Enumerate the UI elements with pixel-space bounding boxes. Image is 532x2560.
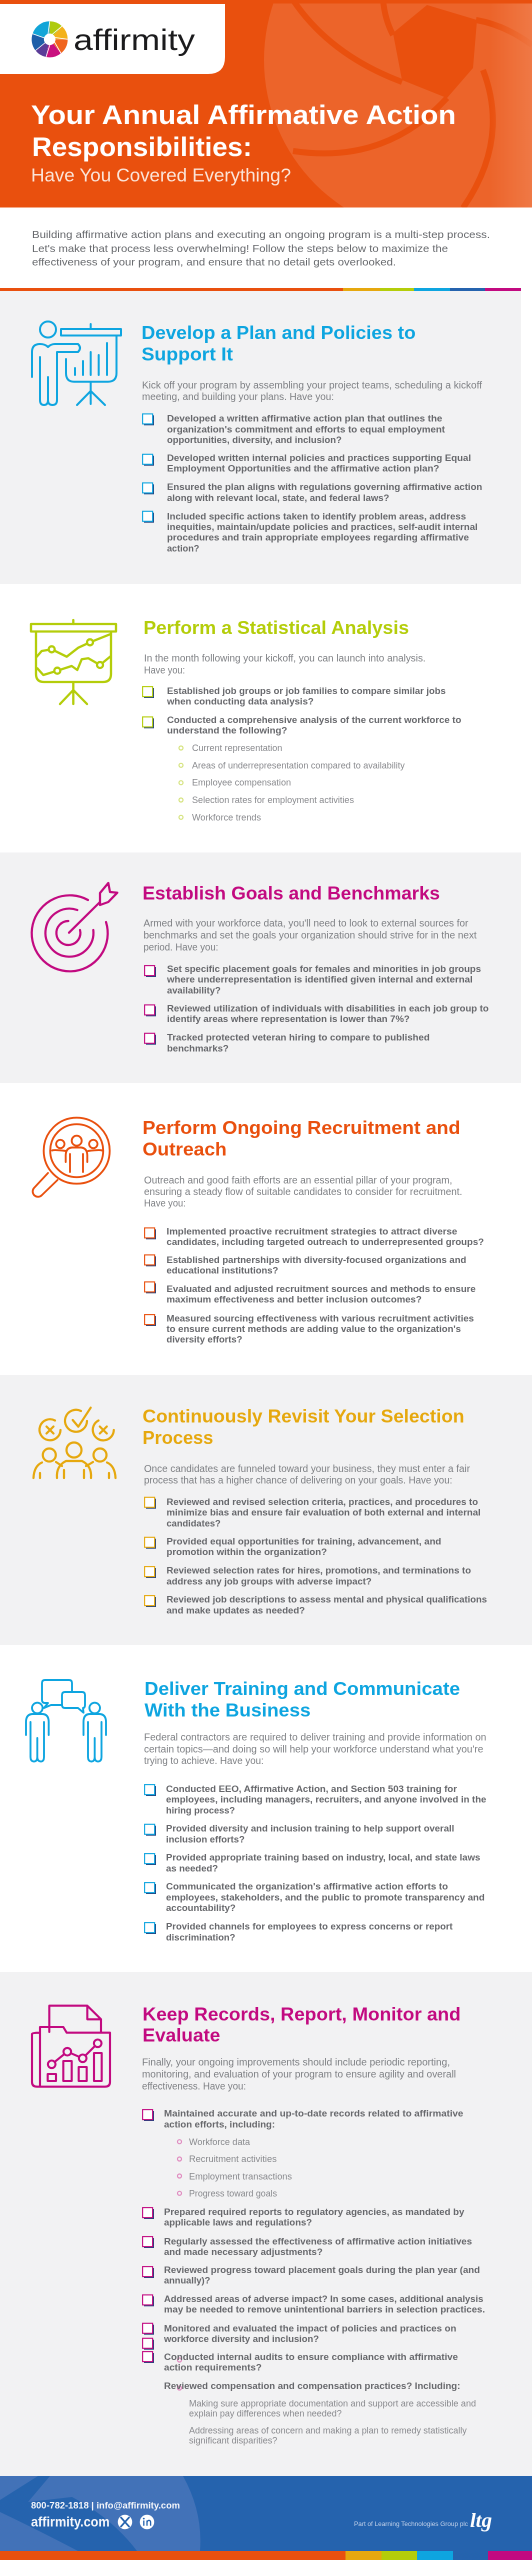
checklist item [145, 1535, 442, 1557]
panel: develop a plan [0, 291, 521, 584]
checklist item [143, 2338, 458, 2373]
panel: recruitment and outreach [33, 1117, 484, 1345]
checklist item [145, 1565, 471, 1586]
sub-bullet list: Addressing areas of concern and making a plan to remedy statistically [189, 2426, 467, 2436]
sub-bullet list: Workforce data [189, 2137, 250, 2147]
checklist item: employees, stakeholders, and the public to promote transparency and [166, 1891, 485, 1902]
heading [142, 2003, 461, 2046]
sub-bullet list: Workforce trends [192, 812, 262, 822]
intro paragraph: Kick off your program by assembling your project teams, scheduling a kickoff [142, 380, 482, 391]
intro paragraph: period. Have you: [144, 942, 218, 953]
checklist item: Provided channels for employees to express concerns or report [166, 1921, 453, 1932]
checklist item: address any job groups with adverse impact? [166, 1575, 372, 1586]
orange background [0, 0, 532, 208]
intro paragraph [144, 1733, 486, 1767]
checklist item [143, 2235, 472, 2257]
checklist item: benchmarks? [167, 1042, 229, 1053]
aperture watermark [264, 4, 532, 208]
checklist item: Developed written internal policies and practices supporting Equal [167, 452, 471, 463]
checklist item [145, 1282, 476, 1305]
intro paragraph: Finally, your ongoing improvements should include periodic reporting, [142, 2058, 450, 2069]
footer watermark [0, 2476, 200, 2551]
heading [142, 1406, 464, 1448]
footer background [0, 2476, 532, 2551]
checklist item [143, 2206, 465, 2228]
sub-bullet list [179, 743, 405, 822]
heading: Process [142, 1427, 213, 1448]
checklist item: to ensure current methods are adding value to the organization's [166, 1323, 461, 1334]
checklist item: annually)? [164, 2275, 211, 2286]
intro text: effectiveness of your program, and ensure that no detail gets overlooked. [32, 258, 396, 268]
sub-bullet list [178, 2137, 293, 2199]
checklist item: Reviewed compensation and compensation practices? Including: [164, 2380, 460, 2391]
checklist item: action efforts, including: [164, 2118, 275, 2129]
panel background [0, 291, 521, 584]
icon: two people talking [26, 1680, 106, 1762]
icon: presenter with chart [32, 322, 121, 405]
footer [0, 2476, 532, 2560]
intro paragraph: benchmarks and set the goals your organization should strive for in the next [144, 931, 477, 942]
sub-bullet list: Employment transactions [189, 2171, 293, 2181]
checklist item [145, 1312, 474, 1345]
checklist item: procedures and train appropriate employees regarding affirmative [167, 532, 469, 543]
checklist item [145, 1881, 485, 1913]
checklist item: Conducted EEO, Affirmative Action, and Section 503 training for [166, 1783, 457, 1794]
panel background [0, 1972, 532, 2476]
heading: Evaluate [142, 2025, 220, 2046]
heading: Establish Goals and Benchmarks [142, 883, 440, 904]
intro paragraph: ensuring a steady flow of suitable candidates to consider for recruitment. [144, 1187, 462, 1198]
sub-bullet list: Recruitment activities [189, 2154, 277, 2164]
website: affirmity.com [31, 2514, 110, 2530]
checklist item: Prepared required reports to regulatory agencies, as mandated by [164, 2206, 465, 2217]
checklist item: when conducting data analysis? [166, 696, 314, 707]
heading: With the Business [144, 1699, 311, 1720]
sub-bullet list: explain pay differences when needed? [189, 2408, 342, 2418]
intro paragraph: Federal contractors are required to deliver training and provide information on [144, 1733, 486, 1744]
checklist item: hiring process? [166, 1804, 235, 1815]
contact line: 800-782-1818 | info@affirmity.com [31, 2499, 180, 2510]
checklist item [145, 1594, 487, 1615]
checklist item: diversity efforts? [166, 1334, 243, 1345]
checklist item: Monitored and evaluated the impact of policies and practices on [164, 2322, 457, 2333]
checklist item [145, 1852, 480, 1873]
rainbow divider [0, 288, 521, 291]
intro paragraph: trying to achieve. Have you: [144, 1756, 264, 1767]
icon: affirmity aperture logo [32, 21, 68, 57]
intro paragraph: monitoring, and evaluation of your program to ensure agility and overall [142, 2069, 456, 2080]
intro paragraph: effectiveness. Have you: [142, 2081, 246, 2092]
checklist item: minimize bias and ensure fair evaluation of both external and internal [166, 1507, 481, 1518]
panel: selection process [0, 1375, 532, 1645]
checklist item: Established job groups or job families to compare similar jobs [167, 685, 446, 696]
checklist item: may be needed to remove unintentional barriers in selection practices. [164, 2304, 485, 2315]
icon: folder with chart [32, 2006, 110, 2087]
heading: Support It [142, 344, 233, 364]
checklist item: Addressed areas of adverse impact? In some cases, additional analysis [164, 2293, 483, 2304]
checklist item: opportunities, diversity, and inclusion? [167, 434, 342, 445]
sub-bullet list: Areas of underrepresentation compared to availability [192, 760, 405, 770]
title: Responsibilities: [32, 132, 252, 162]
checklist item: and make updates as needed? [166, 1604, 305, 1615]
checklist item [143, 2293, 485, 2315]
checklist item [143, 2264, 480, 2286]
checklist item: Ensured the plan aligns with regulations governing affirmative action [167, 481, 483, 492]
heading: Outreach [142, 1138, 227, 1159]
title: Your Annual Affirmative Action [31, 100, 456, 130]
checklist item: candidates, including targeted outreach to underrepresented groups? [166, 1236, 484, 1247]
heading: Develop a Plan and Policies to [142, 322, 416, 343]
logo card [0, 4, 225, 74]
panel: statistical analysis [31, 617, 462, 822]
intro paragraph [144, 654, 426, 676]
heading: Deliver Training and Communicate [144, 1678, 460, 1699]
checklist item: Set specific placement goals for females and minorities in job groups [167, 963, 481, 974]
checklist item: action? [167, 542, 200, 553]
intro paragraph: process that has a higher chance of delivering on your goals. Have you: [144, 1476, 452, 1487]
intro paragraph: Outreach and good faith efforts are an essential pillar of your program, [144, 1175, 452, 1186]
icon: LinkedIn social [140, 2515, 154, 2529]
header banner [0, 0, 532, 208]
checklist item: Tracked protected veteran hiring to compare to published [167, 1032, 430, 1043]
checklist item: identify areas where representation is lower than 7%? [167, 1013, 410, 1024]
checklist item: Conducted internal audits to ensure compliance with affirmative [164, 2351, 458, 2362]
intro paragraph [142, 2058, 456, 2092]
checklist item [143, 481, 483, 503]
intro paragraph: meeting, and building your plans. Have you: [142, 392, 334, 403]
checklist item: Employment Opportunities and the affirmative action plan? [167, 463, 440, 474]
checklist item: understand the following? [167, 725, 288, 736]
checklist item: Provided appropriate training based on industry, local, and state laws [166, 1852, 480, 1863]
checklist item: employees, including managers, recruiters, and anyone involved in the [166, 1794, 486, 1805]
checklist item: Evaluated and adjusted recruitment sources and methods to ensure [166, 1283, 476, 1294]
subtitle: Have You Covered Everything? [31, 165, 291, 186]
rainbow footer bar [0, 2551, 532, 2560]
intro paragraph [144, 1464, 471, 1487]
checklist item: Implemented proactive recruitment strategies to attract diverse [166, 1225, 457, 1236]
checklist item: Conducted a comprehensive analysis of the current workforce to [167, 714, 462, 725]
checklist item [145, 1032, 430, 1053]
intro text: Building affirmative action plans and executing an ongoing program is a multi-step process. [32, 230, 490, 241]
sub-bullet list: Progress toward goals [189, 2189, 277, 2199]
intro paragraph [144, 919, 477, 953]
intro paragraph: Armed with your workforce data, you'll need to look to external sources for [144, 919, 469, 930]
intro paragraph: Have you: [144, 1199, 186, 1210]
heading [144, 1678, 460, 1720]
checklist item: Maintained accurate and up-to-date records related to affirmative [164, 2108, 463, 2119]
checklist item: educational institutions? [166, 1265, 279, 1276]
sub-bullet list [189, 2399, 476, 2445]
sub-bullet list: Current representation [192, 743, 282, 753]
checklist item: Reviewed utilization of individuals with disabilities in each job group to [167, 1002, 489, 1013]
checklist item [143, 2322, 457, 2344]
checklist item: Reviewed selection rates for hires, promotions, and terminations to [166, 1565, 471, 1576]
heading: Keep Records, Report, Monitor and [142, 2003, 461, 2024]
icon: magnifier with people [33, 1118, 110, 1197]
checklist item: Provided diversity and inclusion training to help support overall [166, 1823, 454, 1834]
panel background [0, 852, 521, 1083]
panel: training and communication [26, 1678, 486, 1942]
ltg logo: ltg [470, 2510, 492, 2532]
checklist item: Developed a written affirmative action plan that outlines the [167, 413, 442, 424]
checklist item [145, 1254, 467, 1276]
panel background [0, 1375, 532, 1645]
intro paragraph [142, 380, 482, 403]
checklist item: Reviewed progress toward placement goals during the plan year (and [164, 2264, 480, 2275]
checklist item [145, 1783, 486, 1815]
checklist item [145, 1002, 489, 1024]
checklist item: inequities, maintain/update policies and practices, self-audit internal [167, 521, 478, 532]
heading [142, 322, 416, 364]
sub-bullet list: Making sure appropriate documentation and support are accessible and [189, 2399, 476, 2409]
intro paragraph: Once candidates are funneled toward your business, they must enter a fair [144, 1464, 471, 1475]
heading: Perform Ongoing Recruitment and [142, 1117, 460, 1138]
checklist item: Included specific actions taken to identify problem areas, address [167, 510, 466, 521]
intro text: Let's make that process less overwhelming! Follow the steps below to maximize the [32, 244, 448, 255]
checklist item: and made necessary adjustments? [164, 2246, 323, 2257]
checklist item: action requirements? [164, 2362, 262, 2373]
checklist item: availability? [167, 984, 221, 995]
checklist item: applicable laws and regulations? [164, 2217, 312, 2228]
intro paragraph [144, 1175, 462, 1210]
checklist item [143, 452, 471, 474]
checklist item [143, 2108, 463, 2129]
icon: presentation board with line chart [31, 620, 116, 704]
checklist item [143, 685, 446, 707]
panel: goals and benchmarks [0, 852, 521, 1083]
checklist item: maximum effectiveness and better inclusion outcomes? [166, 1294, 422, 1305]
checklist item: Reviewed job descriptions to assess mental and physical qualifications [166, 1594, 487, 1605]
checklist item [143, 510, 478, 553]
intro paragraph: In the month following your kickoff, you can launch into analysis. [144, 654, 426, 665]
icon: target with arrow [32, 883, 117, 971]
checklist item: Communicated the organization's affirmative action efforts to [166, 1881, 448, 1892]
checklist item: workforce diversity and inclusion? [163, 2333, 319, 2344]
sub-bullet list: significant disparities? [189, 2435, 277, 2445]
checklist item [145, 1496, 481, 1528]
checklist item: along with relevant local, state, and federal laws? [167, 492, 390, 503]
checklist item: promotion within the organization? [166, 1546, 327, 1557]
checklist item: accountability? [166, 1902, 236, 1913]
sub-bullet list: Employee compensation [192, 778, 291, 788]
checklist item [145, 963, 481, 995]
checklist item: Established partnerships with diversity-focused organizations and [166, 1254, 467, 1265]
heading: Continuously Revisit Your Selection [142, 1406, 464, 1427]
logo wordmark: affirmity [74, 24, 195, 57]
checklist item: inclusion efforts? [166, 1833, 245, 1844]
checklist item [145, 1225, 484, 1247]
icon: people with approve and reject marks [34, 1408, 116, 1478]
checklist item [145, 1823, 454, 1844]
checklist item: discrimination? [166, 1931, 236, 1942]
intro text [32, 230, 490, 268]
parent company line: Part of Learning Technologies Group plc [354, 2521, 468, 2528]
checklist item: Regularly assessed the effectiveness of affirmative action initiatives [164, 2235, 472, 2246]
checklist item: where underrepresentation is identified given internal and external [166, 974, 473, 985]
heading [142, 1117, 460, 1159]
title [31, 100, 456, 162]
checklist item [143, 413, 445, 445]
checklist item: Reviewed and revised selection criteria, practices, and procedures to [166, 1496, 478, 1507]
checklist item: as needed? [166, 1862, 218, 1873]
panel: records and reporting [0, 1972, 532, 2476]
checklist item: candidates? [166, 1517, 221, 1528]
checklist item [145, 1921, 453, 1942]
checklist item [143, 714, 462, 736]
sub-bullet list: Selection rates for employment activities [192, 795, 354, 805]
intro paragraph: Have you: [144, 665, 185, 676]
checklist item: Provided equal opportunities for training, advancement, and [166, 1535, 442, 1546]
intro paragraph: certain topics—and doing so will help your workforce understand what you're [144, 1744, 484, 1755]
checklist item: Measured sourcing effectiveness with various recruitment activities [166, 1312, 474, 1323]
heading: Perform a Statistical Analysis [144, 617, 409, 638]
checklist item: organization's commitment and efforts to equal employment [167, 423, 445, 434]
icon: X social [118, 2515, 132, 2529]
